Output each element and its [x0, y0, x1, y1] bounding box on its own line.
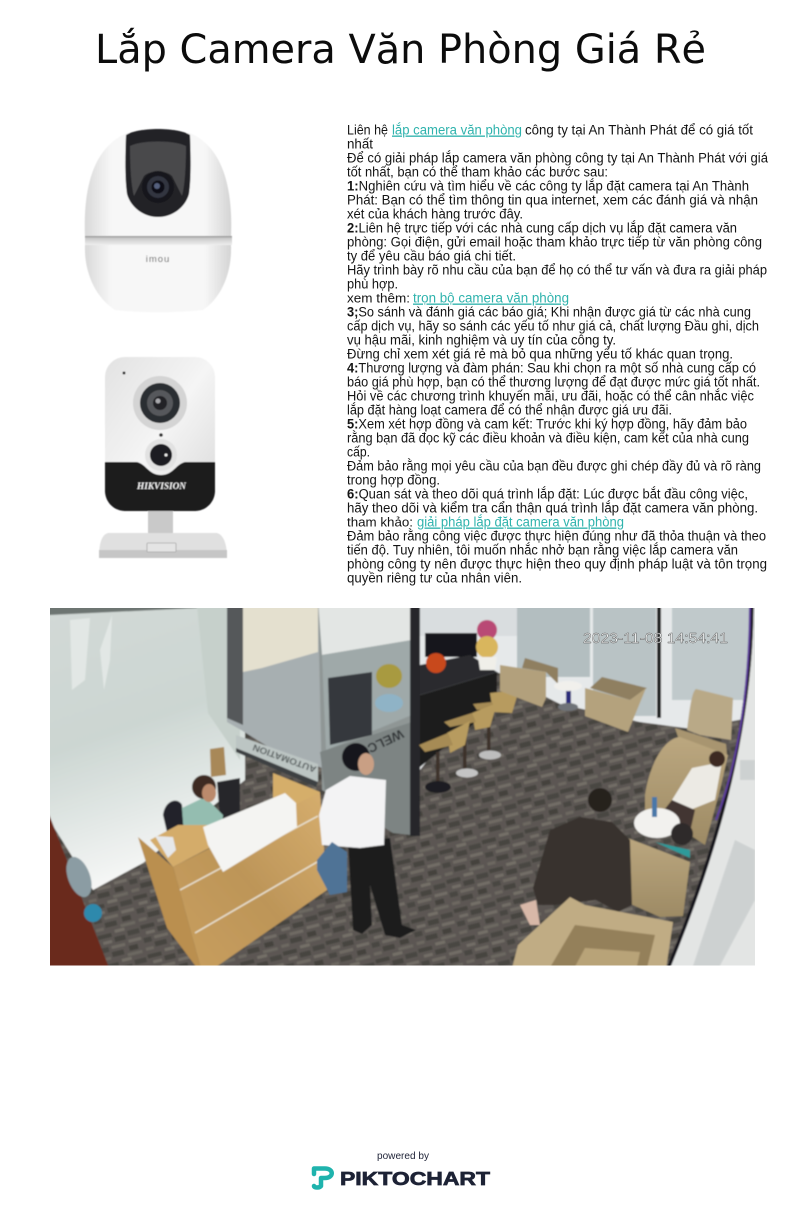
line: see more with link: trọn bộ camera văn phòng [413, 290, 569, 306]
timestamp: 2023-11-08 14:54:41 [583, 630, 728, 647]
white reception box [203, 793, 297, 872]
title: Lắp Camera Văn Phòng Giá Rẻ [95, 27, 706, 73]
text block: article body: phù hợp. [347, 276, 398, 292]
carpet near lounge [418, 672, 688, 781]
line: intro with link: Liên hệ [347, 122, 388, 138]
text block: article body: tốt nhất, bạn có thể tham khảo các bước sau: [347, 164, 608, 180]
glass door and interior [318, 614, 412, 792]
text block: article body: Đảm bảo rằng mọi yêu cầu của bạn đều được ghi chép đầy đủ và rõ ràng [347, 458, 761, 474]
lounge sofa [628, 838, 691, 918]
photo: office lobby CCTV view: AUTOMATION [251, 742, 318, 775]
text block: article body: tiến độ. Tuy nhiên, tôi muốn nhắc nhở bạn rằng việc lắp camera văn [347, 542, 738, 558]
fan and ball [65, 856, 92, 898]
text block: article body: cấp. [347, 444, 370, 460]
text block: article body: 3;So sánh và đánh giá các báo giá; Khi nhận được giá từ các nhà cung [347, 304, 751, 320]
text block: article body: Phát: Bạn có thể tìm thông tin qua internet, xem các đánh giá và nhận [347, 192, 758, 208]
text block: article body: Hỏi về các chương trình khuyến mãi, ưu đãi, hoặc có thể cân nhắc việc [347, 388, 754, 404]
text block: article body: 1:Nghiên cứu và tìm hiểu về các công ty lắp đặt camera tại An Thành [347, 178, 749, 194]
window outside [670, 678, 755, 966]
armchairs back row [522, 658, 558, 684]
text block: article body: 6:Quan sát và theo dõi quá trình lắp đặt: Lúc được bắt đầu công việc, [347, 486, 748, 502]
text block: article body [347, 122, 769, 586]
powered by label: powered by [377, 1151, 429, 1162]
brown door [50, 815, 109, 966]
text block: article body: hãy theo dõi và kiểm tra cẩn thận quá trình lắp đặt camera văn phòng. [347, 500, 758, 516]
text block: article body: xét của khách hàng trước đây. [347, 206, 523, 222]
wordmark: PIKTOCHART [340, 1169, 490, 1189]
black cabinet [217, 778, 240, 820]
reception desk [272, 772, 320, 804]
text block: article body: phòng: Gọi điện, gửi email hoặc tham khảo trực tiếp từ văn phòng công [347, 234, 762, 250]
line: intro with link [347, 122, 753, 138]
photo: office lobby CCTV view: WELCO [356, 726, 406, 760]
text block: article body: Hãy trình bày rõ nhu cầu của bạn để họ có thể tư vấn và đưa ra giải pháp [347, 262, 767, 278]
man in dark jacket [533, 817, 632, 912]
reception bar [425, 633, 477, 657]
carpet floor [56, 722, 739, 966]
line: intro with link: công ty tại An Thành Phát để có giá tốt [525, 122, 753, 138]
standing man [317, 743, 416, 938]
icon: Hikvision cube camera [99, 357, 227, 558]
text block: article body: quyền riêng tư của nhân viên. [347, 570, 522, 586]
text block: article body: Để có giải pháp lắp camera văn phòng công ty tại An Thành Phát với giá [347, 150, 769, 166]
left glass wall [40, 606, 245, 890]
text block: article body: 2:Liên hệ trực tiếp với các nhà cung cấp dịch vụ lắp đặt camera văn [347, 220, 737, 236]
line: see more with link: xem thêm: [347, 290, 410, 306]
receptionist chair [162, 800, 184, 832]
icon: imou dome camera [85, 129, 232, 312]
curtains [517, 600, 590, 677]
text block: article body: cấp dịch vụ, hãy so sánh các yếu tố như giá cả, chất lượng Đầu ghi, dịch [347, 318, 759, 334]
meeting room behind glass [227, 600, 322, 768]
receptionist [180, 798, 224, 826]
text block: article body: lắp đặt hàng loạt camera để có thể nhận được giá ưu đãi. [347, 402, 672, 418]
line: reference with link: giải pháp lắp đặt camera văn phòng [417, 514, 624, 530]
text block: article body: ty để yêu cầu báo giá chi tiết. [347, 248, 516, 264]
text block: article body: trong hợp đồng. [347, 472, 440, 488]
line: reference with link: tham khảo: [347, 514, 413, 530]
icon: imou dome camera: imou [146, 254, 170, 265]
text block: article body: Đảm bảo rằng công việc được thực hiện đúng như đã thỏa thuận và theo [347, 528, 766, 544]
footer: powered by Piktochart [314, 1151, 490, 1189]
text block: article body: rằng bạn đã đọc kỹ các điều khoản và điều kiện, cam kết của nhà cung [347, 430, 749, 446]
lounge chair with seated man [645, 737, 728, 845]
icon: Piktochart logo [314, 1168, 332, 1188]
bar stools [419, 690, 519, 793]
text block: article body: 5:Xem xét hợp đồng và cam kết: Trước khi ký hợp đồng, hãy đảm bảo [347, 416, 747, 432]
photo: office lobby CCTV view [40, 600, 770, 976]
text block: article body: phòng công ty nên được thực hiện theo quy định pháp luật và tôn trọng [347, 556, 767, 572]
round table [634, 808, 680, 838]
front sofa [512, 896, 674, 966]
text block: article body: Đừng chỉ xem xét giá rẻ mà bỏ qua những yếu tố khác quan trọng. [347, 346, 733, 362]
icon: Hikvision cube camera: HIKVISION [136, 481, 187, 491]
line: intro with link: lắp camera văn phòng [392, 122, 522, 138]
text block: article body: 4:Thương lượng và đàm phán: Sau khi chọn ra một số nhà cung cấp có [347, 360, 756, 376]
text block: article body: vụ hậu mãi, kinh nghiệm và uy tín của công ty. [347, 332, 616, 348]
text block: article body: nhất [347, 136, 373, 152]
text block: article body: báo giá phù hợp, bạn có thể thương lượng để đạt được mức giá tốt nhất. [347, 374, 760, 390]
